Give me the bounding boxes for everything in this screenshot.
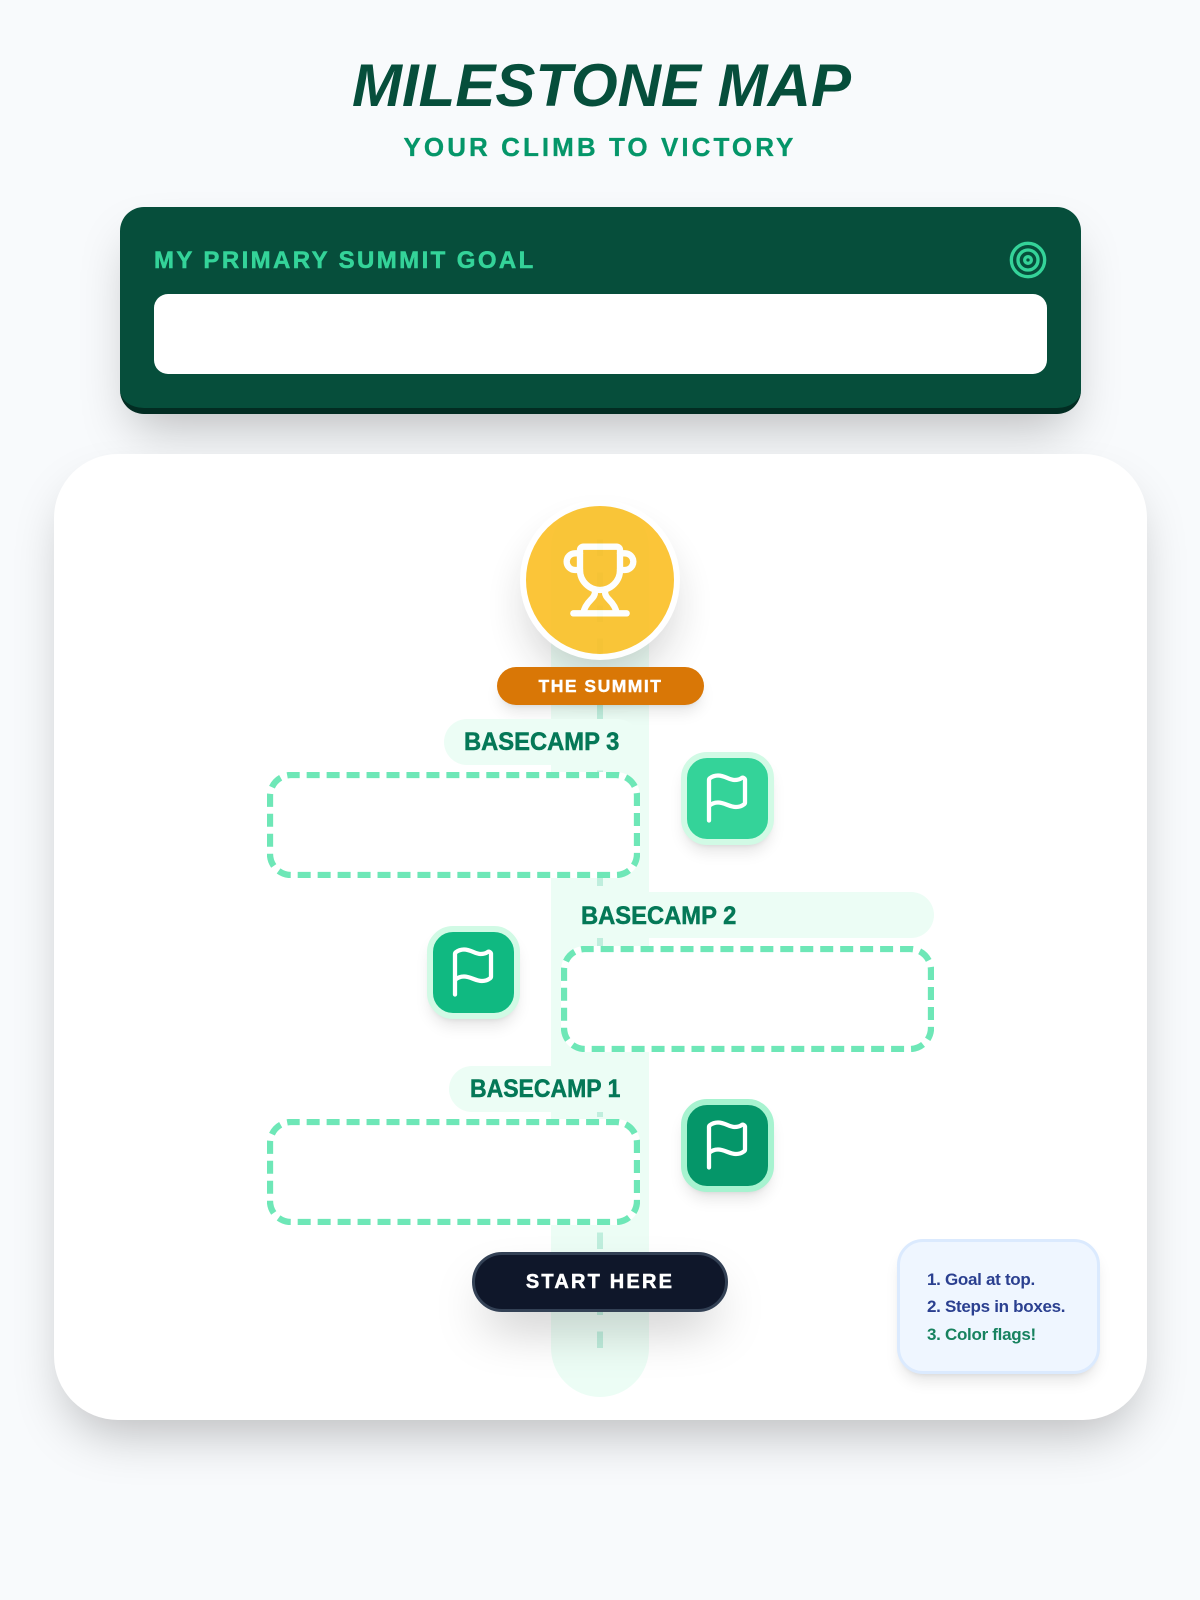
trail dashed centre line [597,523,603,1348]
start here button [472,1252,728,1312]
basecamp 3 input box [267,772,640,878]
start here button: START HERE [526,1271,674,1293]
basecamp 3 text: BASECAMP 3 [464,728,619,756]
basecamp 1 flag tile [681,1099,774,1192]
basecamp 2 label [561,892,934,938]
basecamp 3 label [444,719,640,765]
basecamp 2 input box [561,946,934,1052]
icon: trophy [564,544,636,616]
icon: flag [452,947,494,997]
panel: milestone map [54,454,1147,1420]
basecamp 2 flag tile [427,926,520,1018]
basecamp 1 input box [267,1119,640,1225]
summit trophy badge [520,500,680,660]
climbing trail [551,500,649,1397]
instructions note [897,1239,1100,1374]
basecamp 1 text: BASECAMP 1 [470,1075,620,1103]
basecamp 3 flag tile [681,752,774,845]
subtitle: YOUR CLIMB TO VICTORY [404,132,796,162]
goal input box [154,294,1047,374]
instruction 3: 3. Color flags! [927,1325,1036,1344]
icon: target [1010,242,1046,278]
goal heading: MY PRIMARY SUMMIT GOAL [154,247,536,274]
instruction 2: 2. Steps in boxes. [927,1297,1065,1316]
dashed outline [267,772,640,878]
dashed outline [561,946,934,1052]
icon: flag [706,1120,748,1170]
summit label pill [497,667,704,705]
panel: primary summit goal [120,207,1081,414]
icon: flag [706,773,748,823]
instruction 1: 1. Goal at top. [927,1270,1035,1289]
title: MILESTONE MAP [352,52,851,119]
basecamp 2 text: BASECAMP 2 [581,902,736,930]
summit label pill: THE SUMMIT [539,676,662,696]
dashed outline [267,1119,640,1225]
basecamp 1 label [449,1066,640,1112]
